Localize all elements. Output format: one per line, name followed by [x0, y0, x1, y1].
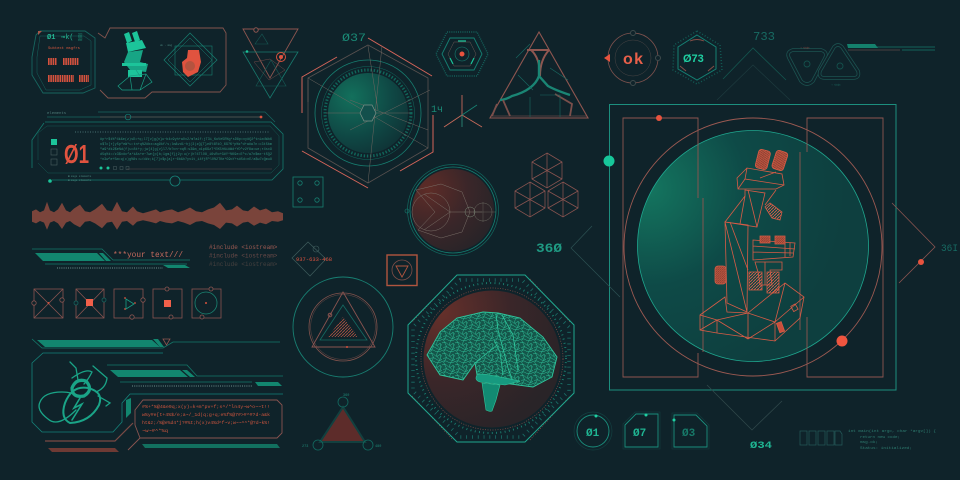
chart: brain in octagon	[408, 275, 574, 442]
chevron code: 733	[753, 30, 775, 44]
code snippet: #include <iostream>	[209, 244, 278, 251]
card caption: Subtext msgfrs	[48, 46, 80, 51]
panel: main microscope scope	[604, 104, 896, 390]
brain	[427, 312, 557, 411]
icon: Ø73 hexagon	[673, 31, 722, 84]
badge Ø7	[623, 412, 660, 449]
badge Ø3	[672, 413, 709, 449]
icon: rounded triangle pair	[788, 44, 935, 88]
code text box: ht&z;/%@e%d4*j?#%t;h(x)v4%d^f~v;w~~^^*@?d~k%!	[142, 420, 270, 426]
small print: msg.ok;	[860, 440, 878, 444]
small print: Status: initialized;	[860, 446, 912, 450]
chart: hexagon scope: 1ч	[431, 105, 443, 116]
icon: cube cluster	[515, 153, 578, 217]
square 4	[153, 287, 182, 319]
arrow: side chevrons: 36I	[941, 244, 958, 255]
card labels: ▒	[78, 33, 83, 42]
code text box: #%+*%@4&e9q;x(y)=k+m*pv+f;s^/*ln4y~w^o~~t!!	[142, 404, 270, 410]
badge Ø3: Ø3	[682, 428, 696, 440]
data rows: ^a9*#k2$e%d(f)u=8t+y;jw[4]g{v}l7/b?cn~xqR:s3&m_o1p6GzT*EK5h%i#Wd+YO^v2f8a=ue;r4sx9	[100, 147, 272, 151]
icon: solid triangle with nodes: 480	[375, 445, 381, 449]
barcodes	[48, 62, 89, 78]
chart: hexagon scope	[302, 33, 443, 188]
data rows	[100, 137, 272, 161]
small print	[848, 429, 936, 450]
icon: phone diamond tag	[292, 242, 332, 276]
panel: microscope card	[32, 28, 226, 98]
icon: rounded triangle pair: ◦◦▷▷	[831, 83, 841, 88]
icon: red sample in diamonds	[164, 33, 217, 86]
footnote: ■ msgs elements	[68, 178, 92, 182]
scope labels: Ø37	[342, 33, 366, 45]
data rows: #p*r$t%^4k&e(z)sD=+q;l7[v]g{n}u~b4c9yh+wOx2/m?a1f:jT3i_KoVe5R%g*sD8p=xy#Q2^tnLm4Wb6	[100, 137, 272, 141]
badge Ø1	[574, 412, 612, 450]
icon row: bottom badges	[574, 412, 936, 452]
code text box	[128, 400, 282, 450]
small print: int main(int argc, char *argv[]) {	[848, 429, 936, 433]
icon: solid triangle with nodes: 360	[343, 394, 349, 398]
panel: virus card	[32, 339, 283, 452]
data rows: d5q%t=/z3$x#c^a*k&s+e~7wn[p]b;1gm{f}j2y:u(r)h?4TlO8_i6vRo+G#Y*%K9e=E^c/a7n$mx~t5Q2	[100, 152, 272, 156]
small print: return new code;	[860, 435, 900, 439]
card labels: Ø1	[47, 33, 55, 42]
square 2	[74, 289, 106, 318]
icon: ok dial: ok	[623, 51, 643, 68]
icon: virus	[39, 362, 110, 423]
footnote	[68, 174, 92, 182]
code text box: ~w~#^*%q	[142, 428, 168, 434]
badge Ø7: Ø7	[633, 428, 646, 440]
battery cells	[800, 431, 842, 445]
footnote: ■ msgs elements	[68, 174, 92, 178]
slogan: ***your text///	[113, 251, 183, 260]
icon: hex badge	[436, 32, 488, 76]
data rows: *n3w^e+5m=q(c)g%8s:u/d#z;k[7]x$p{a}r~6b&h?yv1t_i4fjR^lO%2TKe*G9oY+s#5d=nE/a$w7cQmu8	[100, 157, 272, 161]
panel: microscope card: ok · msg	[160, 44, 173, 47]
chart: audio waveform	[32, 202, 283, 230]
arrow: top chevrons	[717, 30, 790, 100]
code snippet	[209, 244, 278, 268]
square 3	[114, 289, 145, 319]
code text box: w%y#e[t+4%$/e;a~/_1d(q;g+q;e%f%@7#>#^#?d-a&k	[142, 412, 270, 418]
label Ø34: Ø34	[750, 440, 772, 452]
icon: large microscope	[700, 149, 804, 341]
icon: small microscope	[118, 31, 152, 90]
icon: triangle with branches	[490, 32, 588, 118]
icon: phone diamond tag: 937-633-468	[296, 257, 332, 263]
square 1	[32, 289, 64, 318]
code snippet: #include <iostream>	[209, 261, 278, 268]
selector squares	[51, 139, 57, 165]
code snippet: #include <iostream>	[209, 252, 278, 260]
icon: framed inverted triangle	[387, 255, 417, 286]
icon: asterisk star	[444, 95, 482, 127]
icon: ok dial	[604, 30, 660, 86]
badge Ø1: Ø1	[586, 428, 600, 440]
right frame	[98, 28, 226, 98]
icon: overlapping triangles	[243, 28, 298, 98]
data rows: o$7c[r]y5p^eW*u:tn+q%2#bx=ag9kf/s;lm&vd1~hj(3)zQ{T}e8Y4RiO_6G?K*p%s^d+a#w7n:c3t5bm	[100, 142, 272, 146]
panel: Ø1 data readout	[32, 111, 283, 186]
icon: triangle in circle	[293, 277, 393, 377]
icon row: five framed squares	[32, 287, 221, 319]
icon: rounded triangle pair: ◦◦▷▷	[800, 46, 810, 51]
status dots	[100, 166, 129, 170]
icon: Ø73 hexagon: Ø73	[683, 53, 704, 65]
icon: solid triangle with nodes: 273	[302, 445, 308, 449]
icon: four-dot tile	[293, 177, 323, 207]
card labels	[47, 33, 83, 42]
side labels: 36Ø	[536, 241, 562, 256]
header bar: your text	[32, 249, 190, 268]
card labels: ⊸k(	[61, 34, 74, 42]
arrow: side chevrons	[536, 203, 958, 430]
panel label: elements	[47, 111, 67, 116]
icon: red orb with rings	[405, 164, 498, 256]
icon: solid triangle with nodes	[302, 394, 381, 450]
big number: Ø1	[64, 139, 89, 169]
square 5	[192, 287, 221, 319]
